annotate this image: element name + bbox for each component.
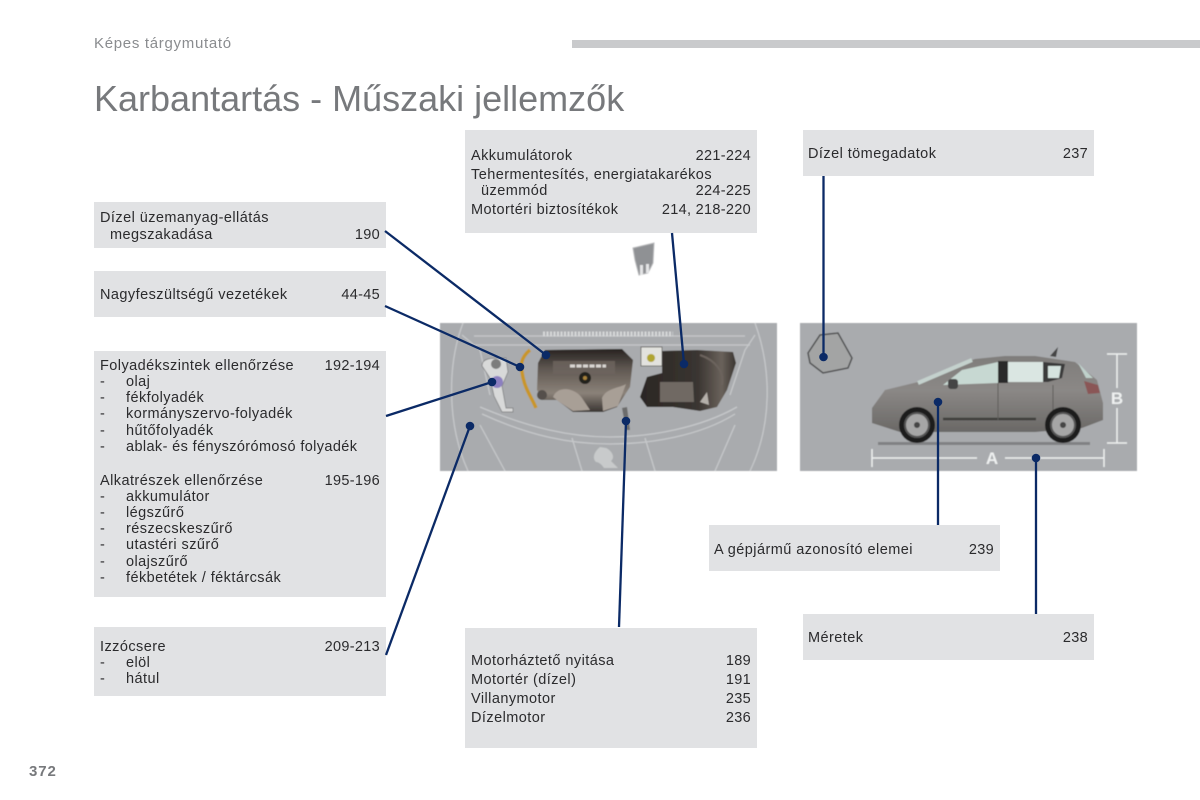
panel: batteries and fuses: Motortéri biztosítékok [471,202,618,218]
front wheel [899,407,935,443]
panel: fluid levels and component checks: ablak- és fényszórómosó folyadék [126,439,357,455]
panel: fluid levels and component checks: - [100,505,105,521]
panel: fluid levels and component checks: - [100,489,105,505]
page number: 372 [29,763,57,780]
panel: bulb replacement: 209-213 [325,639,380,655]
car windows [943,362,998,385]
panel: fluid levels and component checks: - [100,439,105,455]
dimension A: A [986,449,998,468]
panel: diesel weights [803,130,1094,176]
dimension B [1107,354,1127,443]
panel: fluid levels and component checks [94,351,386,597]
lion badge [594,447,618,468]
panel: high-voltage cables [94,271,386,317]
arrow: bonnet and engines [619,417,630,627]
panel: batteries and fuses: 224-225 [696,183,751,199]
panel: vehicle identification: 239 [969,542,994,558]
dimension B: B [1111,389,1123,408]
icon: weight plate [808,333,852,373]
panel: batteries and fuses: Tehermentesítés, energiatakarékos [471,167,712,183]
panel: batteries and fuses [465,130,757,233]
panel: batteries and fuses: üzemmód [481,183,548,199]
arrow: identification [934,398,942,525]
panel: bonnet and engines: Villanymotor [471,691,556,707]
panel: bonnet and engines: Dízelmotor [471,710,546,726]
arrow: batteries and fuses [672,233,688,368]
arrow: fluid levels [386,378,496,416]
panel: fluid levels and component checks: - [100,406,105,422]
panel: fluid levels and component checks: fékfolyadék [126,390,204,406]
panel: diesel weights: Dízel tömegadatok [808,146,936,162]
panel: bonnet and engines: 191 [726,672,751,688]
section label: Képes tárgymutató [94,35,232,52]
panel: bonnet and engines: 236 [726,710,751,726]
panel: fuel supply cut-off: 190 [355,227,380,243]
panel: fluid levels and component checks: - [100,521,105,537]
panel: fluid levels and component checks: - [100,423,105,439]
panel: fluid levels and component checks: fékbetétek / féktárcsák [126,570,281,586]
top grey header bar [572,40,1200,48]
engine cover [537,349,633,412]
panel: bulb replacement: elöl [126,655,150,671]
panel: bulb replacement: - [100,655,105,671]
arrow: dimensions [1032,454,1040,614]
rear wheel [1045,407,1081,443]
vehicle side view illustration [800,323,1137,471]
panel: fluid levels and component checks: olaj [126,374,150,390]
air box and battery [640,350,736,411]
panel: bulb replacement [94,627,386,696]
panel: batteries and fuses: 221-224 [696,148,751,164]
panel: fluid levels and component checks: kormányszervo-folyadék [126,406,293,422]
panel: batteries and fuses: 214, 218-220 [662,202,751,218]
panel: fluid levels and component checks: - [100,570,105,586]
coolant and brake reservoirs [482,358,513,412]
panel: fluid levels and component checks: 192-194 [325,358,380,374]
panel: fluid levels and component checks: Alkatrészek ellenőrzése [100,473,263,489]
panel: diesel weights: 237 [1063,146,1088,162]
panel: vehicle identification [709,525,1000,571]
panel: dimensions: Méretek [808,630,863,646]
leader lines and dots [385,176,1040,655]
panel: fuel supply cut-off: megszakadása [110,227,213,243]
panel: fluid levels and component checks: - [100,390,105,406]
panel: bonnet and engines: Motorháztető nyitása [471,653,614,669]
arrow: diesel weights [819,176,828,361]
panel: fluid levels and component checks: hűtőfolyadék [126,423,214,439]
high-voltage cable [521,350,536,408]
panel: bulb replacement: - [100,671,105,687]
panel: bonnet and engines: 235 [726,691,751,707]
panel: bulb replacement: Izzócsere [100,639,166,655]
panel: bonnet and engines: 189 [726,653,751,669]
panel: fluid levels and component checks: utastéri szűrő [126,537,219,553]
panel: fluid levels and component checks: Folyadékszintek ellenőrzése [100,358,294,374]
panel: fuel supply cut-off [94,202,386,248]
panel: bonnet and engines: Motortér (dízel) [471,672,576,688]
arrow: fuel cut-off to engine [385,231,550,359]
panel: fluid levels and component checks: - [100,554,105,570]
icon: fuse [633,243,654,275]
title: Karbantartás - Műszaki jellemzők [94,78,624,119]
panel: fluid levels and component checks: - [100,537,105,553]
dipstick [622,407,630,430]
panel: fluid levels and component checks: 195-196 [325,473,380,489]
panel: high-voltage cables: Nagyfeszültségű vezetékek [100,287,288,303]
panel: batteries and fuses: Akkumulátorok [471,148,573,164]
panel: high-voltage cables: 44-45 [341,287,380,303]
dimension A [872,449,1104,468]
panel: dimensions [803,614,1094,660]
panel: fluid levels and component checks: akkumulátor [126,489,210,505]
ground shadow [878,442,1090,445]
panel: fluid levels and component checks: - [100,374,105,390]
arrow: bulb replacement [386,422,474,655]
panel: fluid levels and component checks: légszűrő [126,505,184,521]
panel: fuel supply cut-off: Dízel üzemanyag-ellátás [100,210,269,226]
engine bay illustration [440,323,777,471]
panel: dimensions: 238 [1063,630,1088,646]
arrow: high-voltage cables [385,306,524,371]
car body [872,356,1103,432]
panel: fluid levels and component checks: részecskeszűrő [126,521,233,537]
panel: fluid levels and component checks: olajszűrő [126,554,188,570]
panel: bonnet and engines [465,628,757,748]
panel: bulb replacement: hátul [126,671,160,687]
panel: vehicle identification: A gépjármű azonosító elemei [714,542,913,558]
